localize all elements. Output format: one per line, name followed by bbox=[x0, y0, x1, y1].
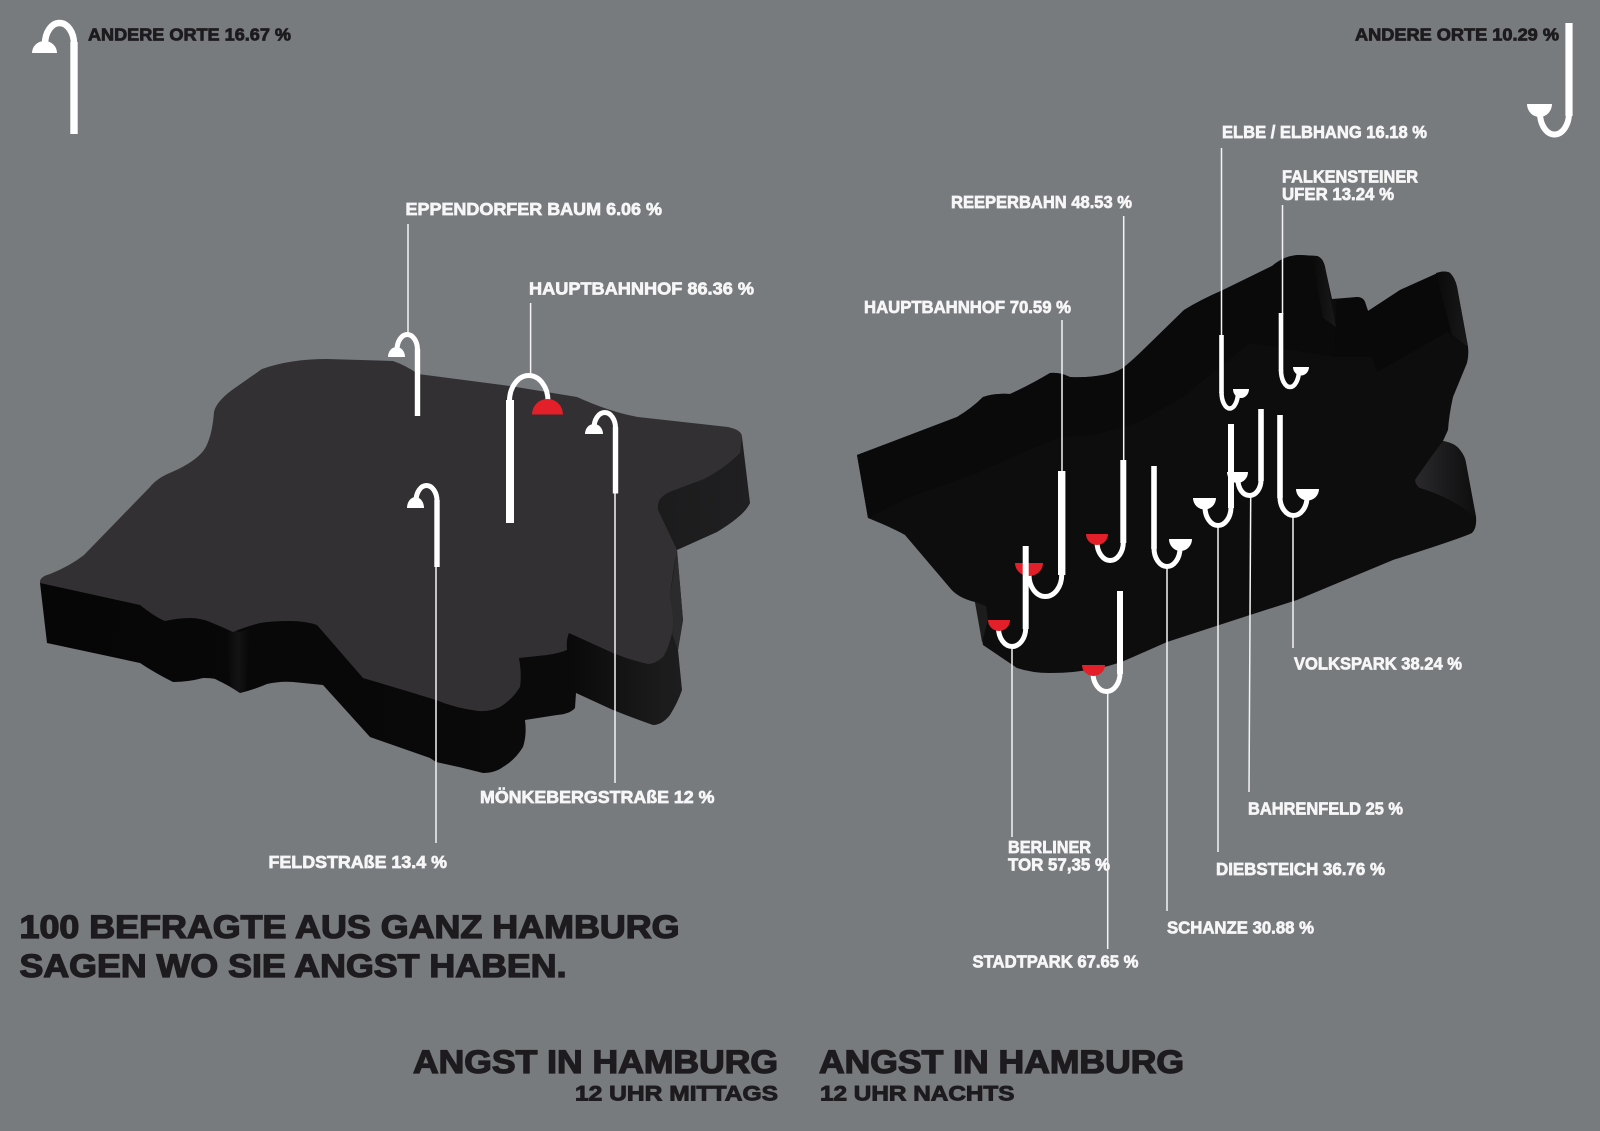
hook: Schanze bbox=[1154, 466, 1192, 911]
label: Diebsteich: DIEBSTEICH 36.76 % bbox=[1216, 859, 1385, 879]
map lobe highlight bbox=[1415, 441, 1476, 517]
hook: Bahrenfeld bbox=[1227, 409, 1261, 792]
map north wall shade bbox=[1335, 272, 1468, 372]
map edge highlight north bbox=[1312, 256, 1336, 327]
hook: Volkspark bbox=[1280, 415, 1319, 648]
label: Eppendorfer Baum: EPPENDORFER BAUM 6.06 % bbox=[406, 199, 662, 219]
map edge highlight east bbox=[1436, 272, 1468, 347]
hook: Stadtpark bbox=[1082, 591, 1120, 949]
map south-west wall bbox=[975, 602, 988, 642]
label: Falkensteiner Ufer bbox=[1282, 166, 1418, 204]
map top surface bbox=[40, 359, 742, 711]
hook: Elbe / Elbhang bbox=[1222, 148, 1249, 408]
map back wall bbox=[857, 255, 1336, 518]
label: Reeperbahn: REEPERBAHN 48.53 % bbox=[951, 192, 1132, 212]
label: Feldstraße: FELDSTRAßE 13.4 % bbox=[268, 852, 447, 872]
hook: Hauptbahnhof mittags bbox=[510, 303, 563, 523]
label: Hauptbahnhof mittags: HAUPTBAHNHOF 86.36 % bbox=[529, 278, 754, 298]
map silhouette bbox=[857, 255, 1476, 673]
map side east face bbox=[670, 550, 683, 650]
title: nachts: 12 UHR NACHTS bbox=[820, 1082, 1014, 1106]
hook: Feldstraße bbox=[407, 485, 437, 843]
label: andere orte mittags: ANDERE ORTE 16.67 % bbox=[88, 24, 291, 44]
hook: Hauptbahnhof nachts bbox=[1015, 320, 1062, 596]
heading: survey statement bbox=[20, 909, 680, 984]
hook: Mönckebergstraße bbox=[585, 412, 616, 783]
heading: survey statement: SAGEN WO SIE ANGST HABEN. bbox=[20, 948, 566, 984]
map side wall bbox=[40, 437, 750, 773]
label: Berliner Tor: TOR 57,35 % bbox=[1008, 854, 1110, 874]
label: Berliner Tor: BERLINER bbox=[1008, 837, 1091, 857]
heading: survey statement: 100 BEFRAGTE AUS GANZ HAMBURG bbox=[20, 909, 680, 945]
hook: Diebsteich bbox=[1193, 424, 1231, 852]
title: mittags bbox=[413, 1044, 778, 1106]
title: nachts: ANGST IN HAMBURG bbox=[819, 1044, 1184, 1080]
label: Berliner Tor bbox=[1008, 837, 1110, 874]
hook: andere orte nachts bbox=[1527, 23, 1569, 134]
label: Elbe / Elbhang: ELBE / ELBHANG 16.18 % bbox=[1222, 122, 1427, 142]
hook: Reeperbahn bbox=[1086, 216, 1124, 561]
panel: map Hamburg 12 Uhr nachts bbox=[857, 255, 1476, 673]
hook: Eppendorfer Baum bbox=[388, 224, 418, 416]
panel: map Hamburg 12 Uhr mittags bbox=[40, 359, 750, 773]
label: andere orte nachts: ANDERE ORTE 10.29 % bbox=[1355, 24, 1559, 44]
label: Falkensteiner Ufer: FALKENSTEINER bbox=[1282, 166, 1418, 186]
title: mittags: ANGST IN HAMBURG bbox=[413, 1044, 778, 1080]
label: Mönckebergstraße: MÖNKEBERGSTRAßE 12 % bbox=[480, 787, 715, 807]
title: mittags: 12 UHR MITTAGS bbox=[575, 1082, 778, 1106]
hook: Berliner Tor bbox=[988, 546, 1026, 837]
label: Bahrenfeld: BAHRENFELD 25 % bbox=[1248, 798, 1403, 818]
map side ridge bbox=[226, 628, 250, 693]
label: Volkspark: VOLKSPARK 38.24 % bbox=[1294, 654, 1462, 674]
title: nachts bbox=[819, 1044, 1184, 1106]
label: Hauptbahnhof nachts: HAUPTBAHNHOF 70.59 % bbox=[864, 297, 1071, 317]
label: Stadtpark: STADTPARK 67.65 % bbox=[972, 952, 1139, 972]
label: Schanze: SCHANZE 30.88 % bbox=[1167, 918, 1314, 938]
hook: Falkensteiner Ufer bbox=[1281, 205, 1309, 387]
hook: andere orte mittags bbox=[32, 23, 74, 134]
label: Falkensteiner Ufer: UFER 13.24 % bbox=[1282, 184, 1394, 204]
